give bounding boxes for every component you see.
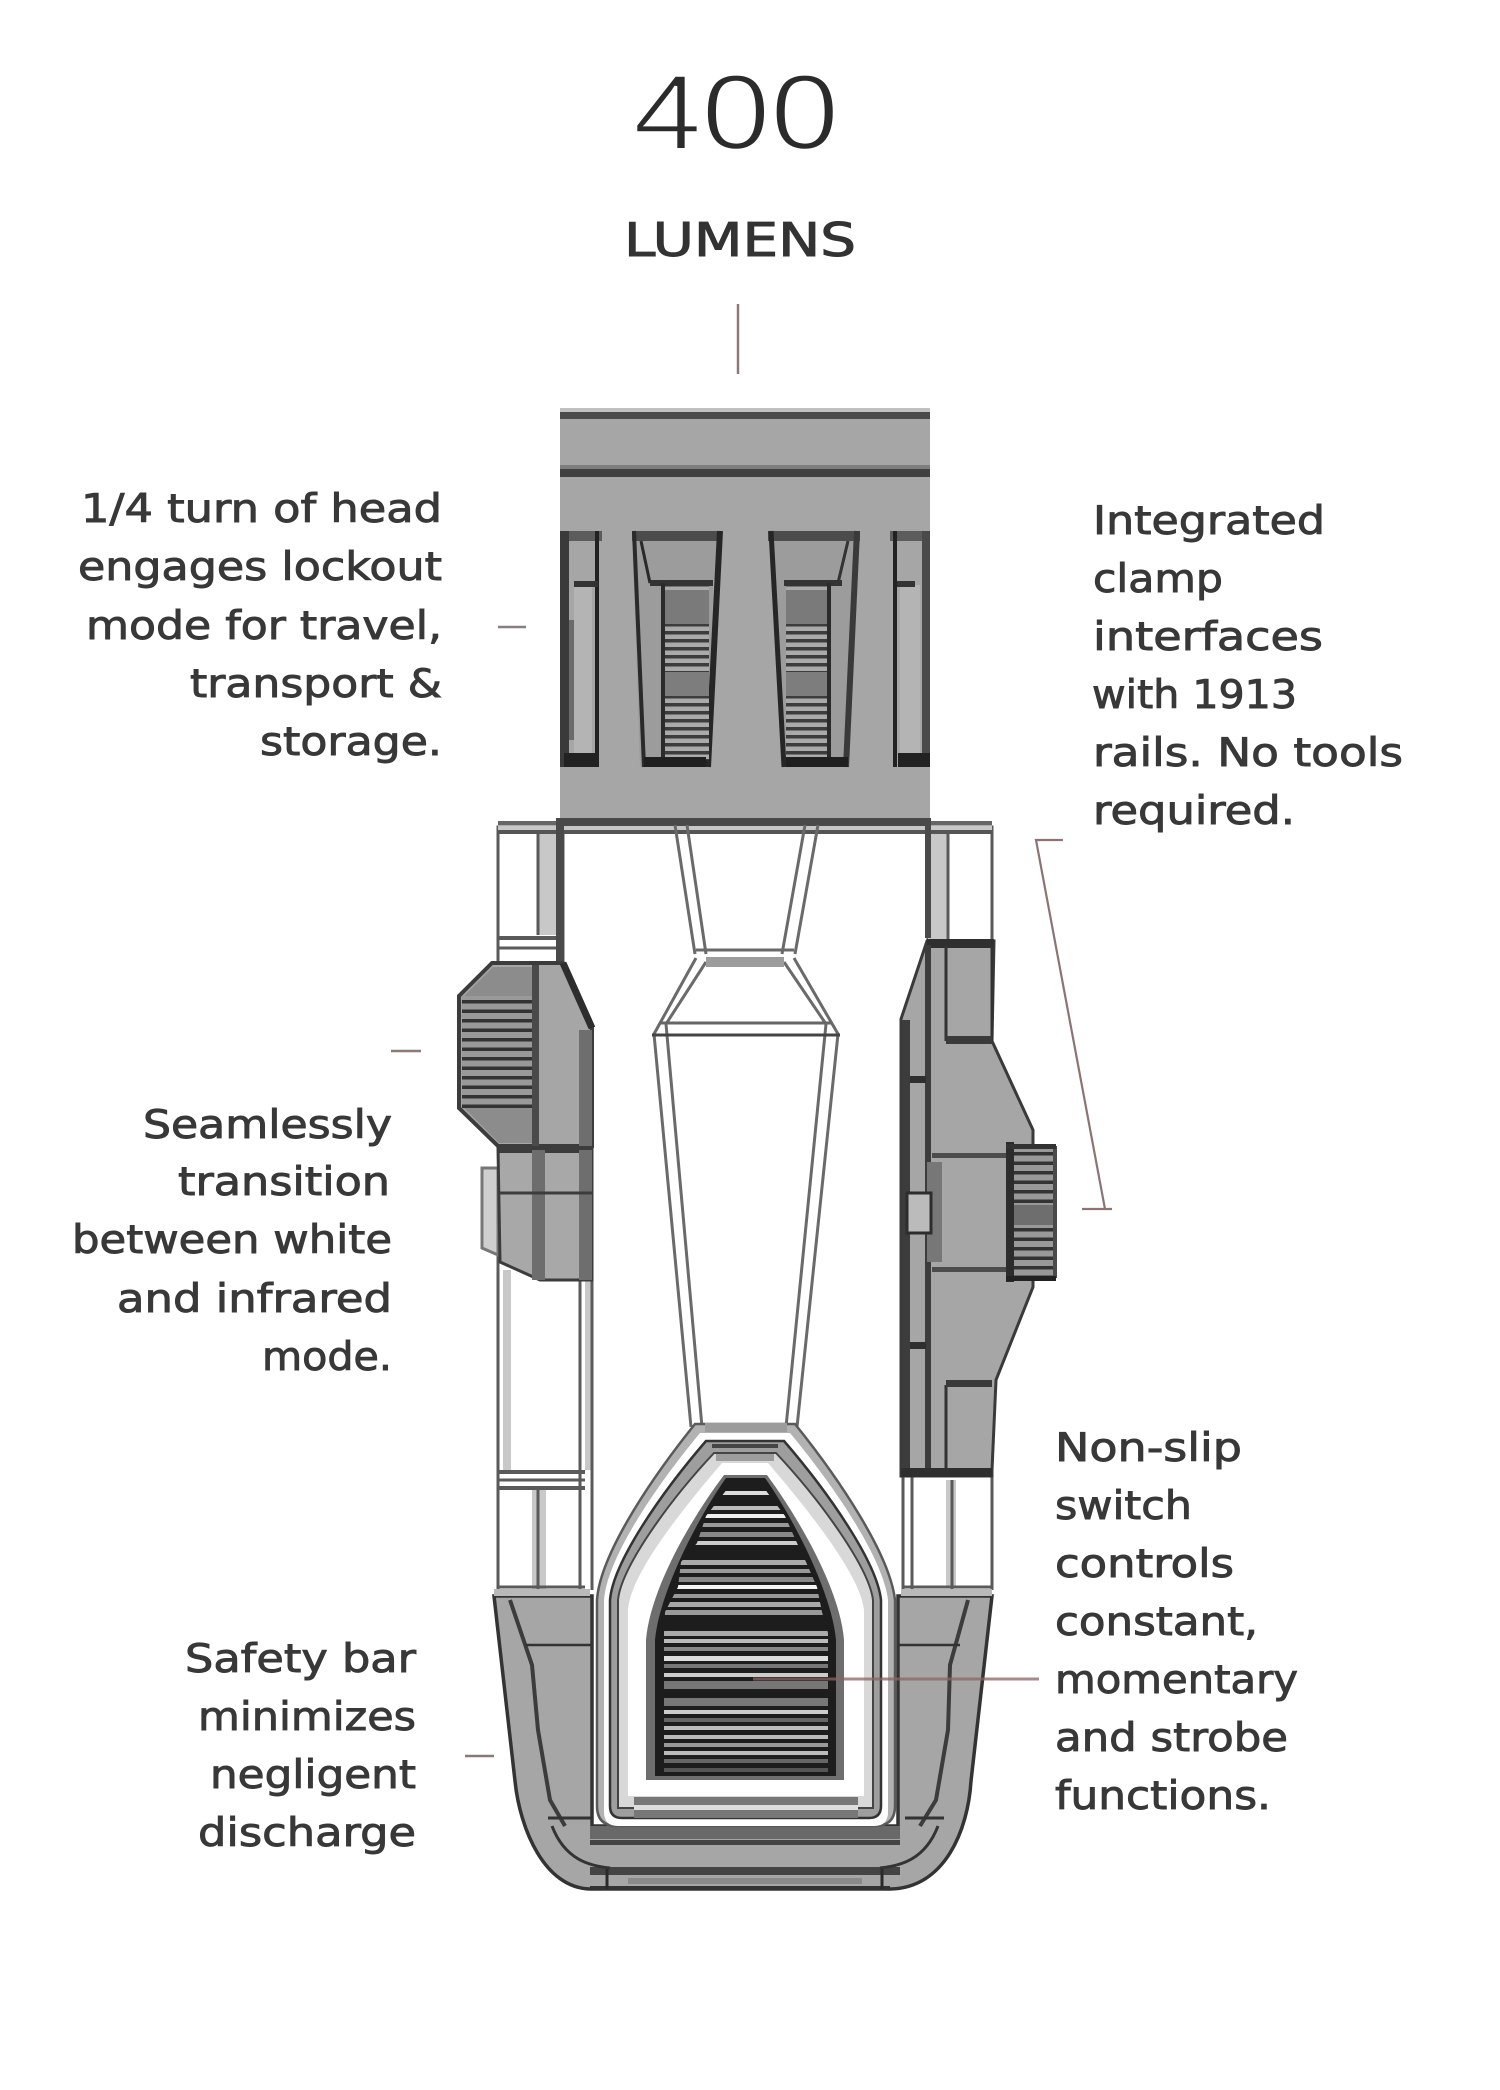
text block: clamp: Integrated	[1093, 499, 1325, 544]
title: 400 lumens: 400	[633, 52, 839, 172]
title: 400 lumens	[624, 52, 856, 267]
window: left partial	[560, 531, 602, 767]
text block: lockout: engages lockout	[78, 545, 442, 590]
window: centre left	[632, 531, 722, 767]
text block: clamp	[1092, 499, 1403, 834]
bracket: clamp	[1036, 840, 1112, 1209]
text block: safety bar: minimizes	[198, 1695, 416, 1740]
text block: transition: between white	[72, 1218, 392, 1263]
text block: safety bar: Safety bar	[185, 1637, 417, 1682]
leader line: lumens	[737, 304, 739, 374]
text block: clamp: interfaces	[1093, 615, 1323, 660]
window: right partial	[890, 531, 930, 767]
text block: clamp: rails. No tools	[1093, 731, 1403, 776]
body: white column outlines	[498, 827, 992, 1590]
text block: switch: Non-slip	[1055, 1426, 1242, 1471]
clamp knob	[1006, 1142, 1057, 1282]
text block: switch: and strobe	[1055, 1716, 1288, 1761]
switch surround arches	[597, 1423, 895, 1826]
text block: lockout: storage.	[260, 720, 442, 765]
text block: lockout	[78, 487, 442, 765]
centre panel outline	[652, 825, 840, 1427]
text block: safety bar	[185, 1637, 417, 1856]
text block: switch: constant,	[1055, 1600, 1258, 1645]
flashlight illustration	[459, 408, 1057, 1890]
head	[560, 408, 930, 826]
right clamp	[901, 939, 1033, 1477]
text block: switch: momentary	[1055, 1658, 1298, 1703]
leader line: safety bar	[465, 1755, 494, 1757]
text block: switch	[1055, 1426, 1298, 1819]
text block: transition	[72, 1103, 392, 1380]
text block: clamp: required.	[1093, 789, 1295, 834]
text block: clamp: with 1913	[1092, 673, 1297, 718]
text block: switch: controls	[1055, 1542, 1234, 1587]
text block: transition: transition	[178, 1160, 390, 1205]
text block: clamp: clamp	[1093, 557, 1223, 602]
centre panel band	[706, 957, 784, 967]
text block: safety bar: negligent	[210, 1753, 416, 1798]
leader line: lockout	[498, 626, 526, 628]
left button	[459, 963, 592, 1280]
switch pad ribs	[640, 1475, 850, 1780]
text block: transition: mode.	[262, 1335, 392, 1380]
leader line: transition	[391, 1050, 421, 1052]
window: centre right	[768, 531, 860, 767]
text block: lockout: transport &	[190, 662, 442, 707]
text block: switch: functions.	[1055, 1774, 1271, 1819]
text block: safety bar: discharge	[198, 1811, 416, 1856]
safety bar	[494, 1589, 992, 1890]
text block: transition: Seamlessly	[143, 1103, 392, 1148]
text block: transition: and infrared	[117, 1277, 392, 1322]
leader line: switch	[753, 1678, 1039, 1680]
top strip under head	[498, 818, 992, 968]
title: 400 lumens: LUMENS	[624, 213, 856, 267]
text block: lockout: mode for travel,	[86, 604, 442, 649]
text block: switch: switch	[1055, 1484, 1192, 1529]
text block: lockout: 1/4 turn of head	[81, 487, 442, 532]
